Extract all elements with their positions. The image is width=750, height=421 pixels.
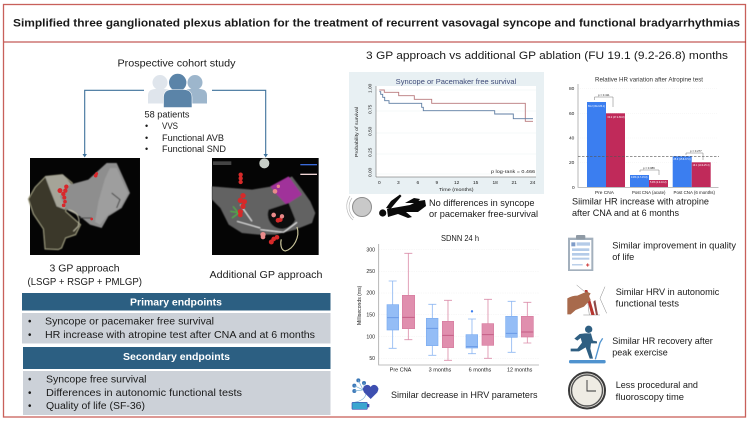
text block: quality of life finding [612,240,736,262]
text block: patient population: Functional AVB [162,133,224,143]
icon: clock [569,372,605,408]
chart: SDNN 24 h box plot [357,234,539,373]
text block: quality of life finding: Similar improvement in quality [612,240,736,250]
caption: 3 GP approach: (LSGP + RSGP + PMLGP) [28,277,142,288]
icon: person fainting [379,194,426,218]
chart: relative HR variation bars: p = 0.411 [598,93,610,97]
chart: relative HR variation bars: 5.9% (2.0-10.2) [650,181,667,184]
chart: relative HR variation bars: p = 0.277 [690,149,702,153]
heading: primary endpoints: Primary endpoints [130,298,222,308]
text block: patient population: VVS [162,121,178,131]
chart: Kaplan-Meier survival: 6 [416,180,420,186]
text block: primary endpoints list: HR increase with atropine test after CNA and at 6 months [45,330,315,341]
text block: HRV finding: Similar decrease in HRV parameters [391,390,538,400]
text block: exercise finding: peak exercise [612,348,668,358]
text block: patient population: • [145,144,148,154]
chart: relative HR variation bars: p = 0.089 [643,166,655,170]
chart: Kaplan-Meier survival: 0 [378,180,381,186]
text block: primary endpoints list: Syncope or pacemaker free survival [45,316,214,328]
arrow: to 3 GP approach [82,90,144,158]
text block: autonomic tests finding: functional tests [616,299,679,309]
text block: secondary endpoints list: • [28,401,32,412]
chart: relative HR variation bars: 9.9% (4.7-15.0) [631,176,648,179]
chart: Kaplan-Meier survival: 0.75 [368,104,374,114]
icon: heart and monitoring device [352,378,378,409]
heading: prospective cohort study: Prospective cohort study [118,58,236,70]
chart: relative HR variation bars: 0 [572,185,575,191]
icon: clipboard [568,235,593,271]
icon: patients group [148,74,207,108]
heading: secondary endpoints [23,347,330,369]
chart: relative HR variation bars: Post CNA (acute) [632,190,666,196]
text block: secondary endpoints list: Differences in autonomic functional tests [46,388,242,399]
chart: relative HR variation bars: 40 [569,136,575,142]
heading: primary endpoints [22,293,330,310]
text block: secondary endpoints list: Syncope free survival [46,374,146,386]
chart: relative HR variation bars: 80 [569,86,575,92]
chart: Kaplan-Meier survival: 3 [397,180,400,186]
icon: treadmill runner [569,326,606,363]
text block: survival finding: No differences in syncope [429,198,534,208]
chart: SDNN 24 h box plot: 150 [366,312,375,318]
title: Simplified three ganglionated plexus ablation for the treatment of recurrent vasovagal syncope and functional bradyarrhythmias [13,18,740,30]
panel: study design [82,58,268,158]
chart: relative HR variation bars: 60 [569,111,575,117]
image: 3 GP approach heart map [28,158,140,255]
chart: Kaplan-Meier survival: 12 [454,180,460,186]
text block: procedure time finding [616,380,698,402]
heading: comparison: 3 GP approach vs additional GP ablation (FU 19.1 (9.2-26.8) months [366,50,729,62]
icon: carotid massage [567,285,607,315]
text block: exercise finding [612,336,713,358]
chart: Kaplan-Meier survival: 18 [492,180,498,186]
chart: SDNN 24 h box plot: 200 [366,291,375,297]
chart: Kaplan-Meier survival [349,72,544,194]
text block: survival finding [429,198,538,219]
chart title: Syncope or Pacemaker free survival [396,77,517,86]
chart: Kaplan-Meier survival: 15 [473,180,479,186]
chart: Kaplan-Meier survival: 9 [436,180,438,186]
survival curve: additional GP [379,90,533,121]
chart: Kaplan-Meier survival: 1.00 [368,83,374,93]
text block: secondary endpoints list [23,371,330,415]
text block: atropine finding [572,197,709,218]
text block: patient population: 58 patients [144,110,190,120]
text block: primary endpoints list [22,313,330,344]
chart: SDNN 24 h box plot: Pre CNA [390,367,412,373]
panel: primary endpoints [22,293,330,344]
text block: patient population: Functional SND [162,144,227,154]
chart: relative HR variation bars: 25.0 (15.8-37.0) [674,158,691,161]
chart: relative HR variation bars [569,78,719,196]
text block: patient population: • [145,121,148,131]
chart: SDNN 24 h box plot: 250 [366,269,375,275]
icon: head orientation marker [259,158,269,168]
text block: atropine finding: after CNA and at 6 months [572,208,679,218]
chart: Kaplan-Meier survival: 0.25 [368,147,374,157]
chart: relative HR variation bars: 60.2 (47.2-66.8) [608,116,625,119]
chart: SDNN 24 h box plot: Milliseconds (ms) [357,285,363,325]
caption: 3 GP approach: 3 GP approach [50,264,120,274]
arrow: to additional GP approach [212,90,268,158]
text block: patient population: • [145,133,148,143]
text block: procedure time finding: fluoroscopy time [616,392,684,402]
chart: SDNN 24 h box plot: 100 [366,334,375,340]
text block: survival finding: or pacemaker free-survival [429,209,538,219]
chart: Kaplan-Meier survival: 21 [512,180,517,186]
image: additional GP approach heart map [212,158,319,255]
chart: Kaplan-Meier survival: 0.50 [368,126,374,136]
text block: quality of life finding: of life [612,252,634,262]
chart: Kaplan-Meier survival: 24 [530,180,536,186]
chart: Kaplan-Meier survival: p log-rank = 0.466 [491,169,535,175]
text block: exercise finding: Similar HR recovery after [612,336,713,346]
chart: relative HR variation bars: 20 [569,160,575,166]
chart title: Relative HR variation after Atropine test [595,78,703,84]
caption: additional GP approach: Additional GP approach [210,270,323,281]
text block: primary endpoints list: • [28,330,32,341]
chart: SDNN 24 h box plot: 50 [369,356,375,362]
chart: SDNN 24 h box plot: 300 [366,247,375,253]
chart: Kaplan-Meier survival: Time (months) [439,187,474,193]
text block: secondary endpoints list: • [28,388,32,399]
text block: autonomic tests finding: Similar HRV in autonomic [616,287,720,297]
text block: patient population [144,110,227,154]
text block: secondary endpoints list: • [28,374,32,386]
text block: secondary endpoints list: Quality of life (SF-36) [46,401,145,412]
chart: SDNN 24 h box plot: 12 months [507,367,533,373]
chart: SDNN 24 h box plot: 6 months [469,367,492,373]
chart: Kaplan-Meier survival: 0.00 [368,167,374,177]
chart: relative HR variation bars: 69.2 (49.2-83.1) [588,105,605,108]
text block: atropine finding: Siimilar HR increase with atropine [572,197,709,207]
chart: relative HR variation bars: Pre CNA [595,190,615,196]
chart: SDNN 24 h box plot: 3 months [429,367,452,373]
panel: secondary endpoints [23,347,330,415]
chart title: SDNN 24 h [441,234,479,243]
chart: Kaplan-Meier survival: Probability of survival [354,107,360,157]
chart: relative HR variation bars: 19.1 (10.0-25.3) [692,164,710,167]
heading: secondary endpoints: Secondary endpoints [123,352,230,363]
survival curve: 3 GP [379,92,533,119]
text block: primary endpoints list: • [28,316,32,328]
chart: relative HR variation bars: Post CNA (6 months) [674,190,715,196]
caption: 3 GP approach [28,264,142,288]
text block: procedure time finding: Less procedural and [616,380,698,390]
icon: pacemaker [347,196,372,220]
text block: autonomic tests finding [616,287,720,309]
